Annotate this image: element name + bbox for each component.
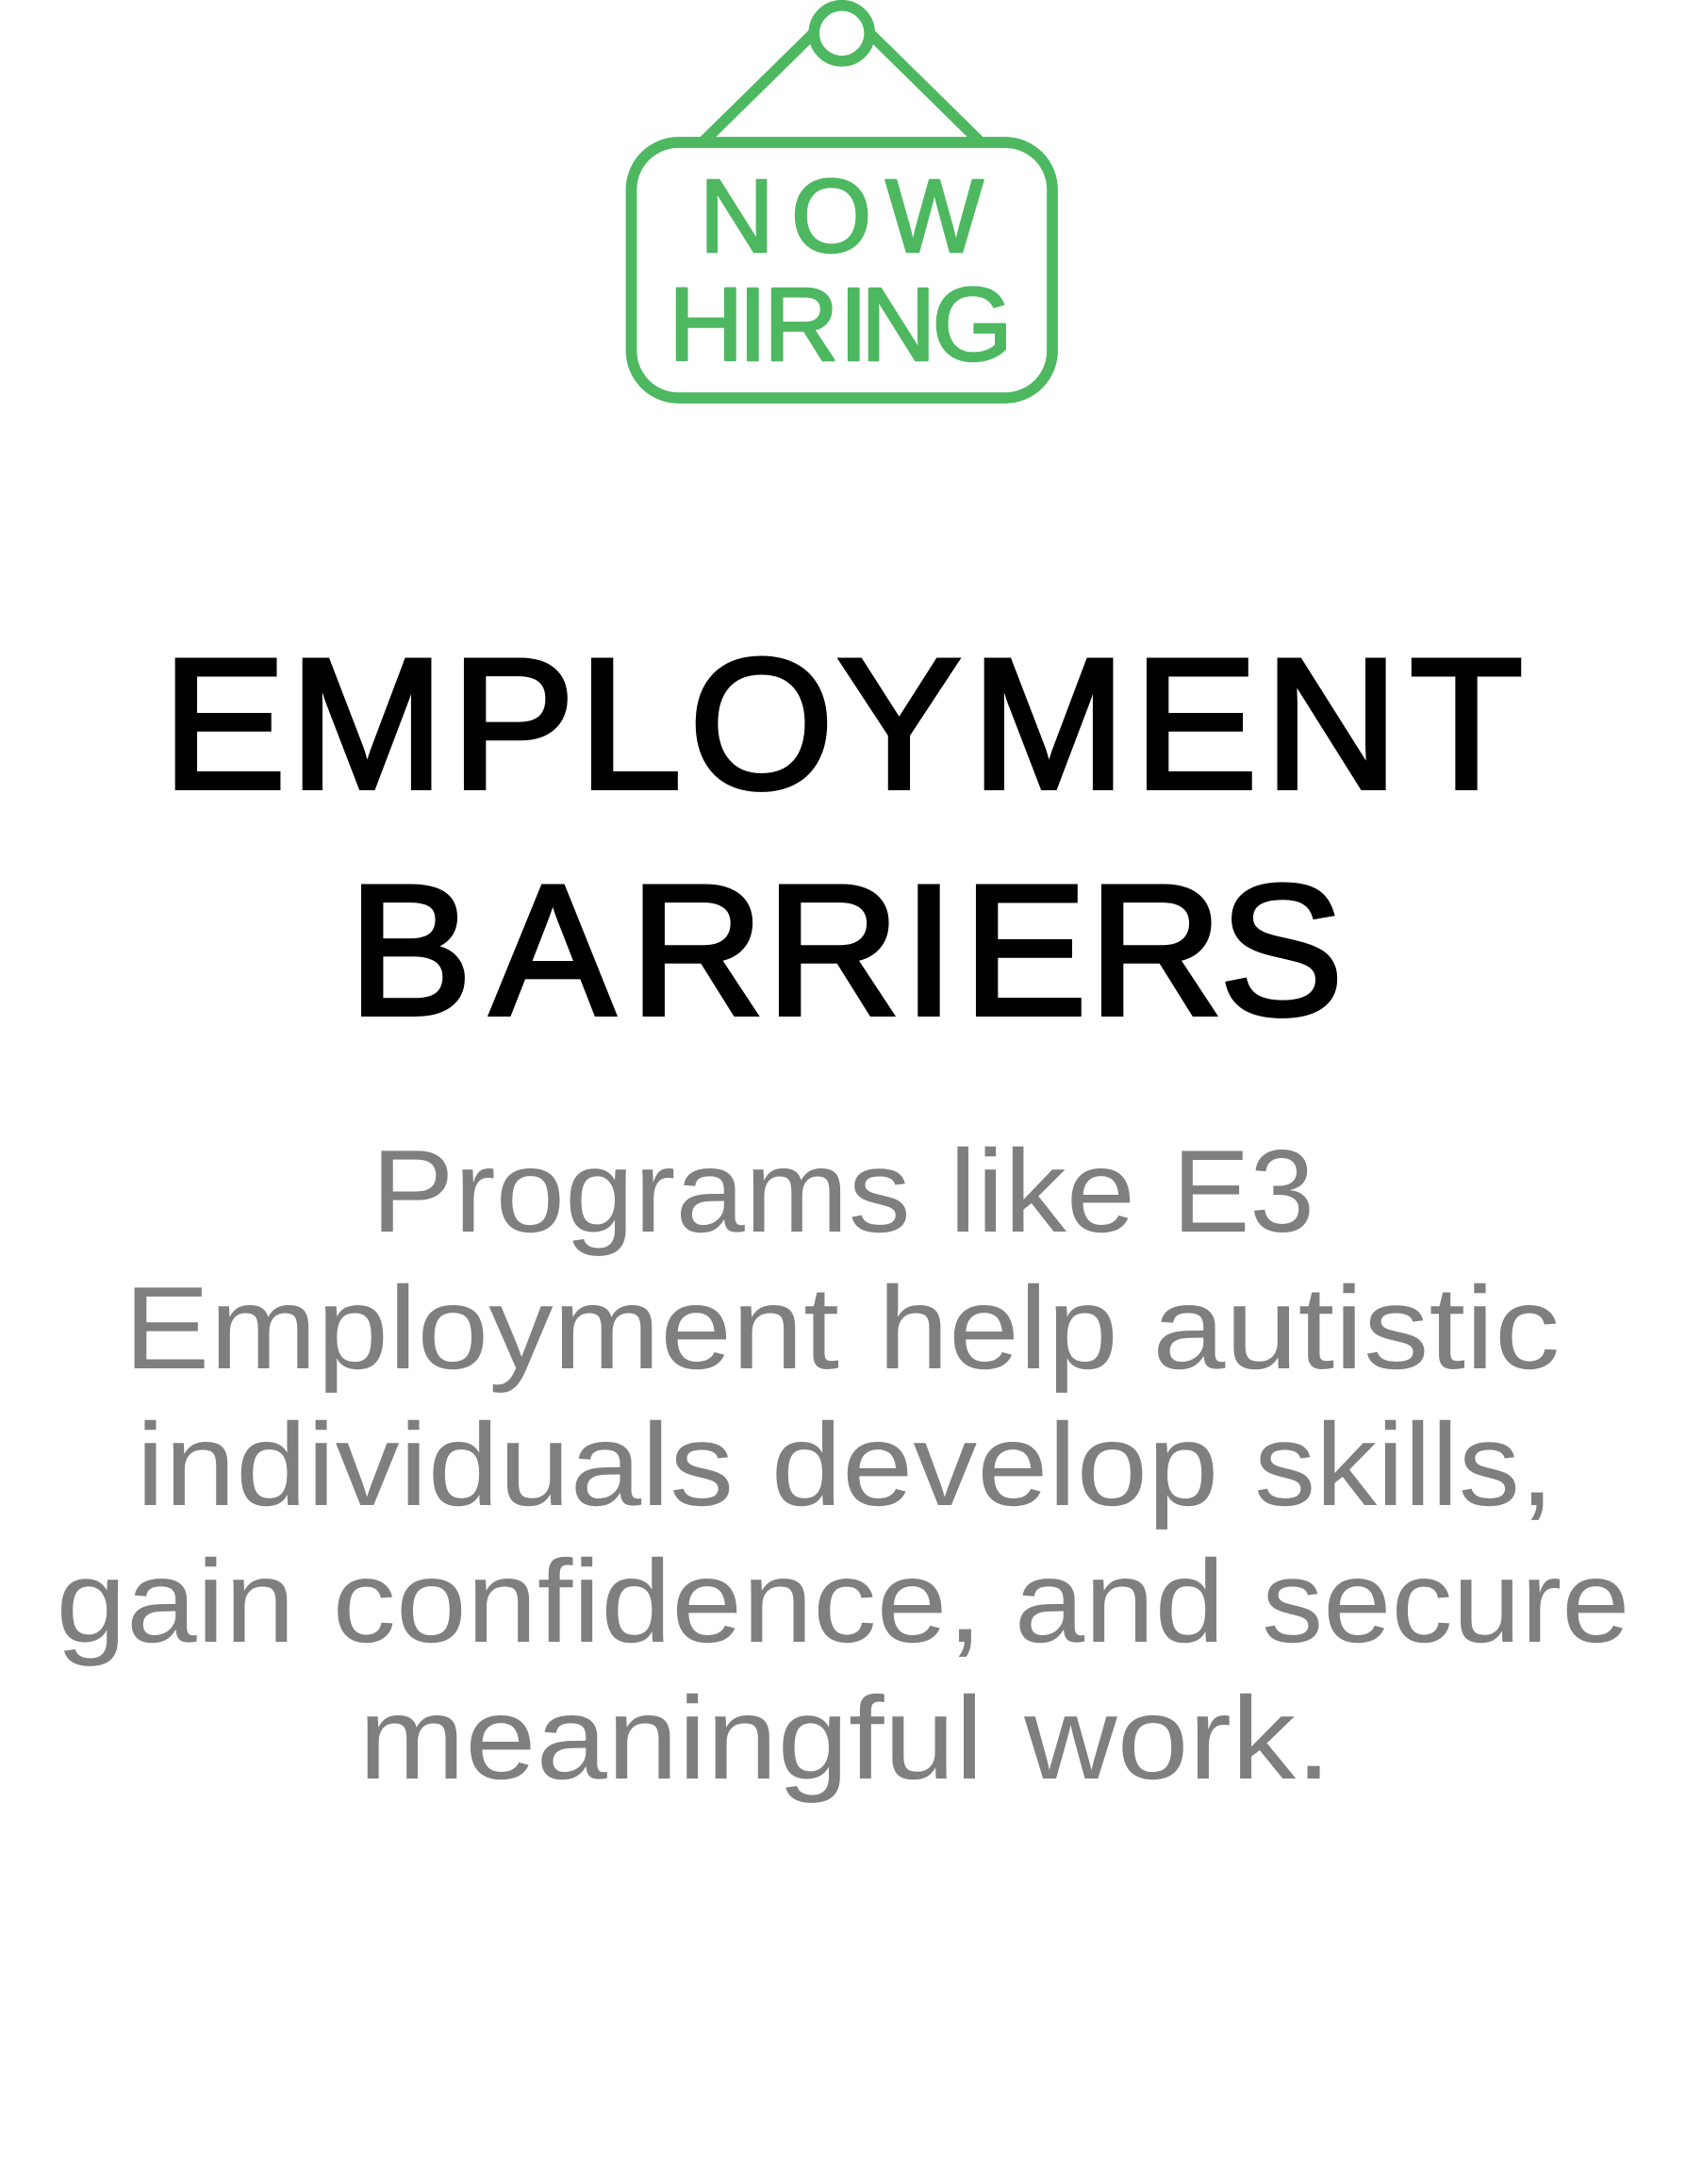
body line 4: and	[1015, 1536, 1225, 1667]
hanging nail circle	[814, 6, 869, 61]
body line 5: work.	[1023, 1673, 1331, 1804]
body line 1: E3	[1172, 1126, 1314, 1257]
body line 2: Employment	[124, 1263, 839, 1394]
title line 2: BARRIERS	[348, 847, 1344, 1054]
title line 1: EMPLOYMENT	[162, 620, 1523, 828]
body line 1: like	[949, 1126, 1135, 1257]
body line 4: confidence,	[332, 1536, 983, 1667]
sign text: hiring: HIRING	[669, 267, 1013, 383]
sign text: now: NOW	[700, 158, 984, 274]
body line 2: autistic	[1152, 1263, 1560, 1394]
icon: hanging now hiring sign	[632, 6, 1052, 398]
sign board	[632, 142, 1052, 398]
title	[162, 620, 1523, 1054]
body line 3: develop	[771, 1399, 1218, 1530]
body line 3: skills,	[1254, 1399, 1554, 1530]
hanging strings	[702, 31, 981, 142]
body line 4: gain	[56, 1536, 295, 1667]
body line 5: meaningful	[358, 1673, 984, 1804]
body line 4: secure	[1262, 1536, 1629, 1667]
body text	[56, 1126, 1629, 1804]
body line 1: Programs	[372, 1126, 911, 1257]
body line 3: individuals	[136, 1399, 734, 1530]
body line 2: help	[878, 1263, 1118, 1394]
